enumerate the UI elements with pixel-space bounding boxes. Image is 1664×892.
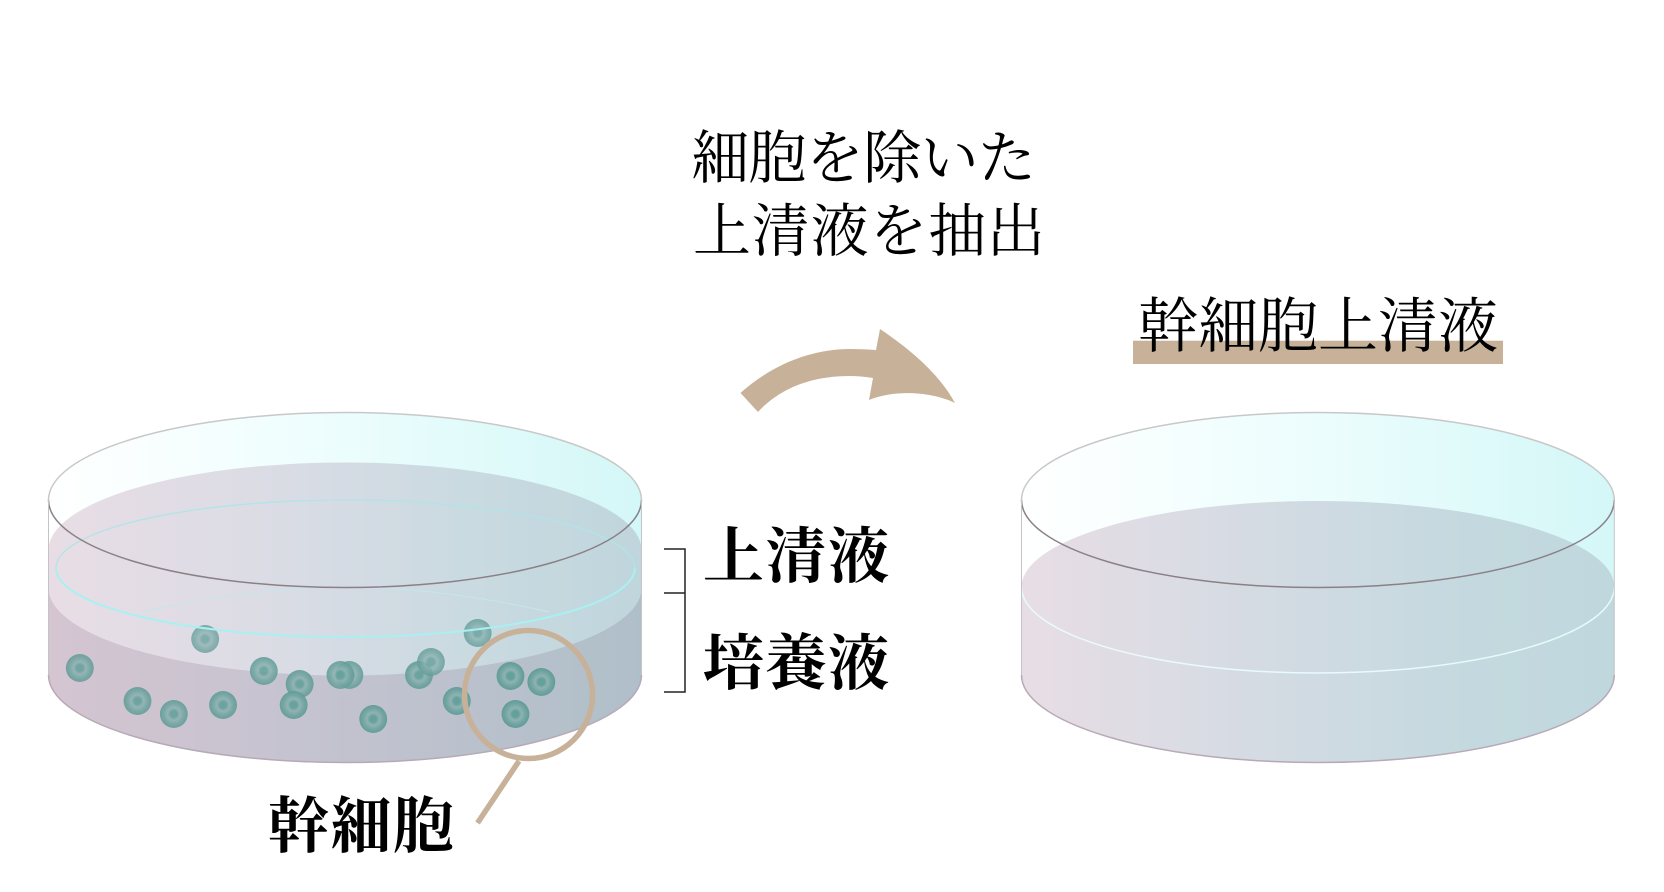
liquid surface front line xyxy=(56,568,635,637)
bracket: supernatant and medium xyxy=(664,549,685,692)
dish outline xyxy=(48,413,641,762)
right heading band xyxy=(1133,341,1503,364)
heading: extract supernatant without cells: 上清液を抽出 xyxy=(693,199,1045,264)
glass body xyxy=(48,413,641,762)
liquid surface back line xyxy=(56,500,635,568)
arrow: extraction direction xyxy=(740,329,955,412)
label: stem cells: 幹細胞 xyxy=(268,794,454,861)
stem cells xyxy=(66,619,555,733)
heading: extract supernatant without cells xyxy=(691,126,1045,264)
left dish: culture with stem cells xyxy=(48,413,641,762)
magnifier callout xyxy=(464,630,592,823)
culture medium layer xyxy=(48,588,641,762)
dish outline xyxy=(1022,412,1614,762)
dish floor back edge xyxy=(142,587,549,612)
supernatant layer xyxy=(48,463,641,762)
right heading: stem cell supernatant: 幹細胞上清液 xyxy=(1138,294,1498,360)
glass body xyxy=(1022,412,1614,762)
label: culture medium: 培養液 xyxy=(703,631,889,698)
heading: extract supernatant without cells: 細胞を除いた xyxy=(691,126,1036,191)
liquid surface front line xyxy=(1022,587,1614,673)
right dish: supernatant only xyxy=(1022,412,1614,762)
label: supernatant: 上清液 xyxy=(703,524,889,591)
supernatant liquid xyxy=(1022,501,1614,762)
